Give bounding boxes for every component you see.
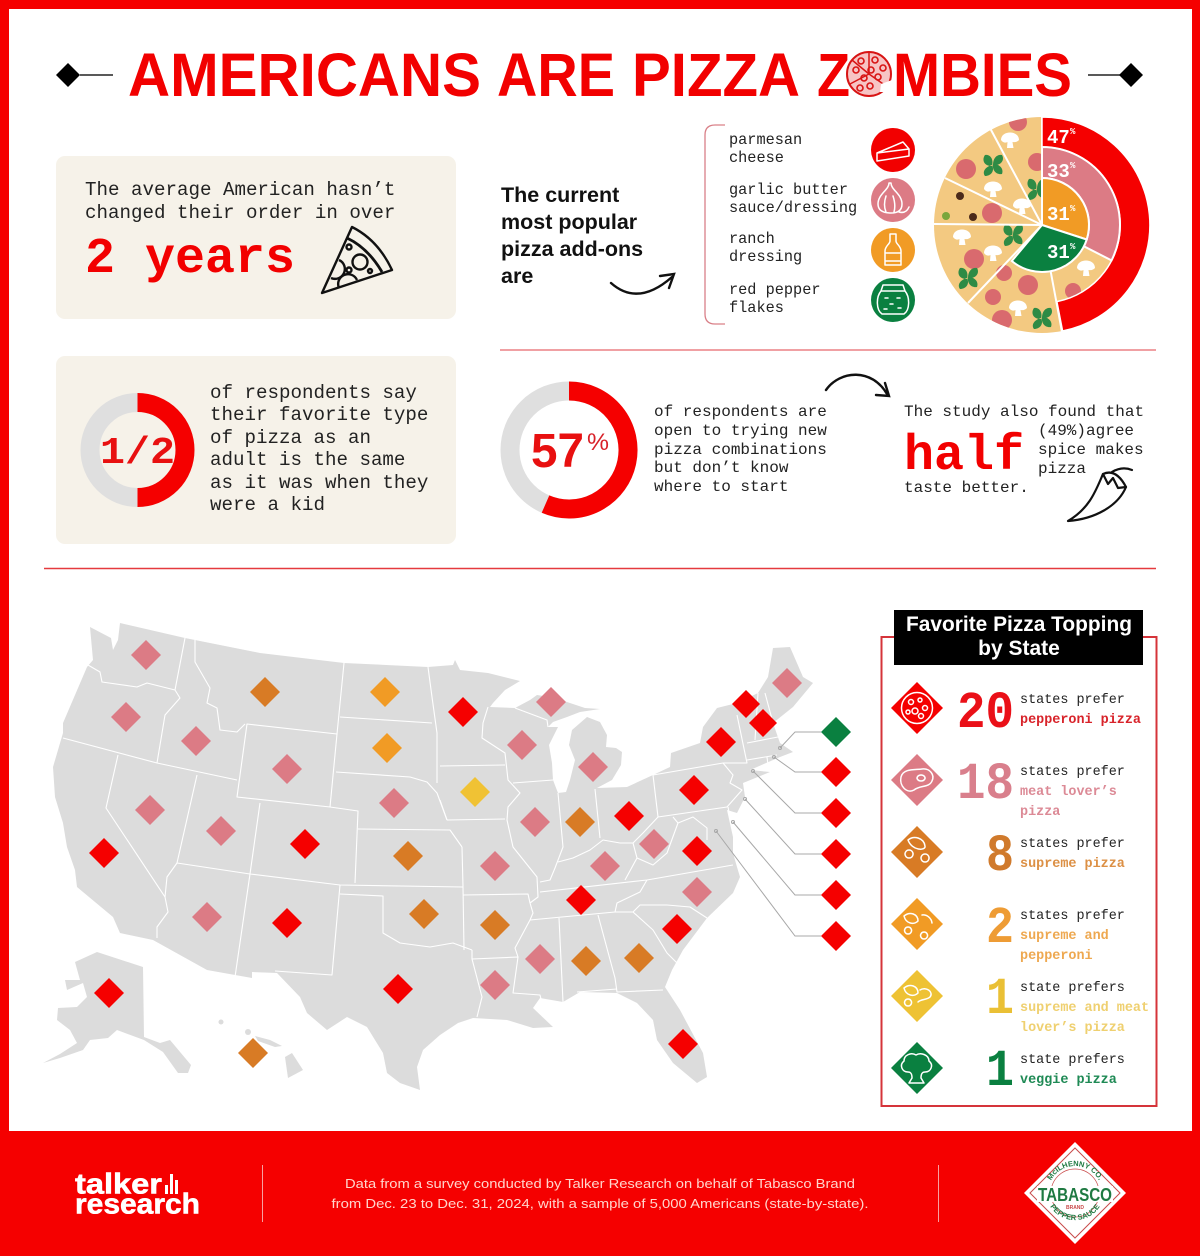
pie percentages: % bbox=[1070, 161, 1076, 171]
legend row: supreme and meat lover's: supreme and meat bbox=[1020, 1001, 1149, 1016]
logo: Tabasco: BRAND bbox=[1066, 1205, 1084, 1211]
pie percentages: % bbox=[1070, 204, 1076, 214]
text: favorite type: of respondents say bbox=[210, 382, 417, 404]
wedge: 31% ranch bbox=[1042, 178, 1089, 240]
logo: Tabasco: PEPPER SAUCE bbox=[1050, 1204, 1100, 1220]
pie percentages: 33 bbox=[1047, 161, 1070, 183]
title text: ARE bbox=[497, 41, 615, 109]
marker: veggie state bbox=[821, 717, 851, 747]
add-ons list bbox=[705, 125, 915, 324]
leader lines bbox=[714, 732, 821, 936]
text: favorite type: of pizza as an bbox=[210, 427, 371, 449]
legend row: supreme bbox=[891, 826, 1125, 886]
legend row: veggie: state prefers bbox=[1020, 1053, 1125, 1068]
icon: pepper flakes bbox=[871, 278, 915, 322]
donut chart: one half bbox=[90, 402, 185, 498]
map: contiguous states bbox=[53, 623, 813, 1090]
icon: ranch bbox=[871, 228, 915, 272]
legend row: supreme: 8 bbox=[986, 827, 1014, 886]
legend row: supreme and pepperoni bbox=[891, 898, 1125, 964]
pie percentages: 31 bbox=[1047, 242, 1070, 264]
legend row: supreme and meat lover's: state prefers bbox=[1020, 981, 1125, 996]
pizza toppings bbox=[942, 113, 1095, 330]
text: 57% respondents bbox=[654, 403, 827, 496]
legend header bbox=[894, 610, 1143, 665]
legend row: supreme and pepperoni: supreme and bbox=[1020, 929, 1109, 944]
pie percentages: 31 bbox=[1047, 204, 1070, 226]
legend row: pepperoni: pepperoni pizza bbox=[1020, 713, 1141, 728]
text: study: The study also found that bbox=[904, 403, 1144, 421]
pie percentages: 47 bbox=[1047, 127, 1070, 149]
chart: pizza pie bbox=[934, 113, 1150, 333]
footer dividers bbox=[262, 1165, 938, 1222]
text block: half bbox=[904, 403, 1144, 521]
text: 57% respondents: but don’t know bbox=[654, 459, 789, 477]
legend row: veggie bbox=[891, 1042, 1125, 1101]
text: favorite type: as it was when they bbox=[210, 472, 428, 494]
legend row: supreme and pepperoni: 2 bbox=[986, 899, 1014, 958]
logo: Tabasco: McILHENNY CO. bbox=[1046, 1160, 1101, 1180]
panel: 2 years bbox=[56, 156, 456, 319]
text: 57% respondents: where to start bbox=[654, 478, 788, 496]
footer note: from Dec. 23 to Dec. 31, 2024, with a sample of 5,000 Americans (state-by-state). bbox=[332, 1196, 868, 1211]
ring: 47% parmesan bbox=[1042, 117, 1150, 331]
footer bbox=[75, 1142, 1126, 1244]
text: 57% respondents: open to trying new bbox=[654, 422, 827, 440]
text: average American: changed their order in over bbox=[85, 202, 395, 224]
text: favorite type: were a kid bbox=[210, 494, 325, 516]
icon: garlic bbox=[871, 178, 915, 222]
legend row: supreme: supreme pizza bbox=[1020, 857, 1125, 872]
title text: PIZZA bbox=[632, 41, 800, 109]
text: favorite type: adult is the same bbox=[210, 449, 405, 471]
main divider bbox=[44, 568, 1156, 570]
pie percentages: % bbox=[1070, 242, 1076, 252]
text: 57% respondents: pizza combinations bbox=[654, 441, 827, 459]
legend row: pepperoni bbox=[891, 682, 1141, 743]
markers: supreme and pepperoni states bbox=[370, 677, 402, 763]
text: favorite type bbox=[210, 382, 428, 516]
heading: add-ons: The current bbox=[501, 183, 619, 207]
text: agree bbox=[1038, 422, 1144, 478]
text: favorite type: their favorite type bbox=[210, 404, 428, 426]
title text bbox=[128, 41, 1072, 109]
legend row: supreme and pepperoni: pepperoni bbox=[1020, 949, 1093, 964]
text: agree: (49%)agree bbox=[1038, 422, 1134, 440]
donut chart: one half: 1/2 bbox=[100, 432, 175, 475]
title text: AMERICANS bbox=[128, 41, 481, 109]
title text: Z bbox=[817, 41, 850, 109]
legend row: supreme: states prefer bbox=[1020, 837, 1125, 852]
add-on labels: flakes bbox=[729, 299, 784, 317]
logo: talker research: talker bbox=[75, 1168, 162, 1200]
legend row: pepperoni: 20 bbox=[957, 684, 1014, 743]
text: taste better: taste better. bbox=[904, 479, 1029, 497]
text: agree: spice makes bbox=[1038, 441, 1144, 459]
chart: 57% donut: % bbox=[587, 429, 609, 456]
legend row: pepperoni: states prefer bbox=[1020, 693, 1125, 708]
add-on labels: garlic butter bbox=[729, 181, 848, 199]
add-on labels: cheese bbox=[729, 149, 784, 167]
text: average American: The average American hasn’t bbox=[85, 179, 395, 201]
legend row: supreme and meat lover's bbox=[891, 970, 1149, 1036]
map: Hawaii bbox=[218, 1020, 303, 1078]
icon: pizza O bbox=[847, 52, 892, 96]
legend row: meat lover's: meat lover’s bbox=[1020, 785, 1117, 800]
map: Alaska bbox=[43, 952, 191, 1073]
add-on labels: ranch bbox=[729, 230, 775, 248]
legend row: meat lover's: pizza bbox=[1020, 805, 1060, 820]
add-on labels bbox=[729, 131, 857, 317]
title bbox=[56, 41, 1143, 109]
heading: add-ons: most popular bbox=[501, 210, 638, 234]
legend row: veggie: veggie pizza bbox=[1020, 1073, 1117, 1088]
logo: talker research: research bbox=[75, 1188, 200, 1220]
map: state borders bbox=[63, 638, 778, 1017]
text: 57% respondents: of respondents are bbox=[654, 403, 827, 421]
add-on labels: red pepper bbox=[729, 281, 821, 299]
legend row: meat lover's: states prefer bbox=[1020, 765, 1125, 780]
icon: chili bbox=[1068, 468, 1132, 521]
markers: meat lover's states bbox=[111, 640, 802, 1000]
panel: half of respondents bbox=[56, 356, 456, 544]
legend header: by State bbox=[978, 637, 1060, 660]
legend row: supreme and meat lover's: lover’s pizza bbox=[1020, 1021, 1125, 1036]
add-on labels: parmesan bbox=[729, 131, 802, 149]
arrow: to add-ons bbox=[611, 274, 674, 294]
title ornament left bbox=[56, 63, 113, 87]
legend row: meat lover's: 18 bbox=[957, 755, 1014, 814]
heading: add-ons: pizza add-ons bbox=[501, 237, 643, 261]
stat: half: half bbox=[904, 428, 1024, 485]
add-on labels: sauce/dressing bbox=[729, 199, 857, 217]
text: average American bbox=[85, 179, 395, 224]
ring: 33% garlic bbox=[1042, 147, 1120, 260]
heading: add-ons: are bbox=[501, 264, 533, 288]
stat: 2 years: 2 years bbox=[85, 231, 295, 288]
marker: Iowa bbox=[460, 777, 490, 807]
US map bbox=[43, 623, 851, 1090]
markers: supreme states bbox=[238, 677, 654, 1068]
add-on labels: dressing bbox=[729, 248, 802, 266]
chart: 57% donut bbox=[510, 391, 628, 509]
legend row: supreme and pepperoni: states prefer bbox=[1020, 909, 1125, 924]
logo: Tabasco bbox=[1024, 1142, 1126, 1244]
arrow: curved bbox=[826, 375, 889, 396]
icon: parmesan bbox=[871, 128, 915, 172]
logo: talker research bbox=[75, 1168, 200, 1220]
logo: Tabasco: TABASCO bbox=[1038, 1185, 1112, 1205]
title ornament right bbox=[1088, 63, 1143, 87]
pie percentages: % bbox=[1070, 127, 1076, 137]
chart: 57% donut: 57 bbox=[531, 425, 584, 478]
markers: pepperoni states bbox=[89, 690, 851, 1059]
pie percentages bbox=[1047, 127, 1076, 264]
heading: add-ons bbox=[501, 183, 643, 288]
icon: pizza slice bbox=[322, 227, 392, 293]
legend row: veggie: 1 bbox=[986, 1042, 1014, 1101]
wedge: 31% pepper bbox=[1012, 225, 1087, 272]
text: agree: pizza bbox=[1038, 460, 1086, 478]
legend header: Favorite Pizza Topping bbox=[906, 613, 1132, 636]
legend row: supreme and meat lover's: 1 bbox=[986, 970, 1014, 1029]
divider top right bbox=[500, 349, 1156, 351]
title text: MBIES bbox=[893, 41, 1072, 109]
footer note: Data from a survey conducted by Talker Research on behalf of Tabasco Brand bbox=[345, 1176, 855, 1191]
footer note bbox=[332, 1176, 868, 1211]
legend panel bbox=[882, 610, 1156, 1106]
legend row: meat lover's bbox=[891, 754, 1125, 820]
